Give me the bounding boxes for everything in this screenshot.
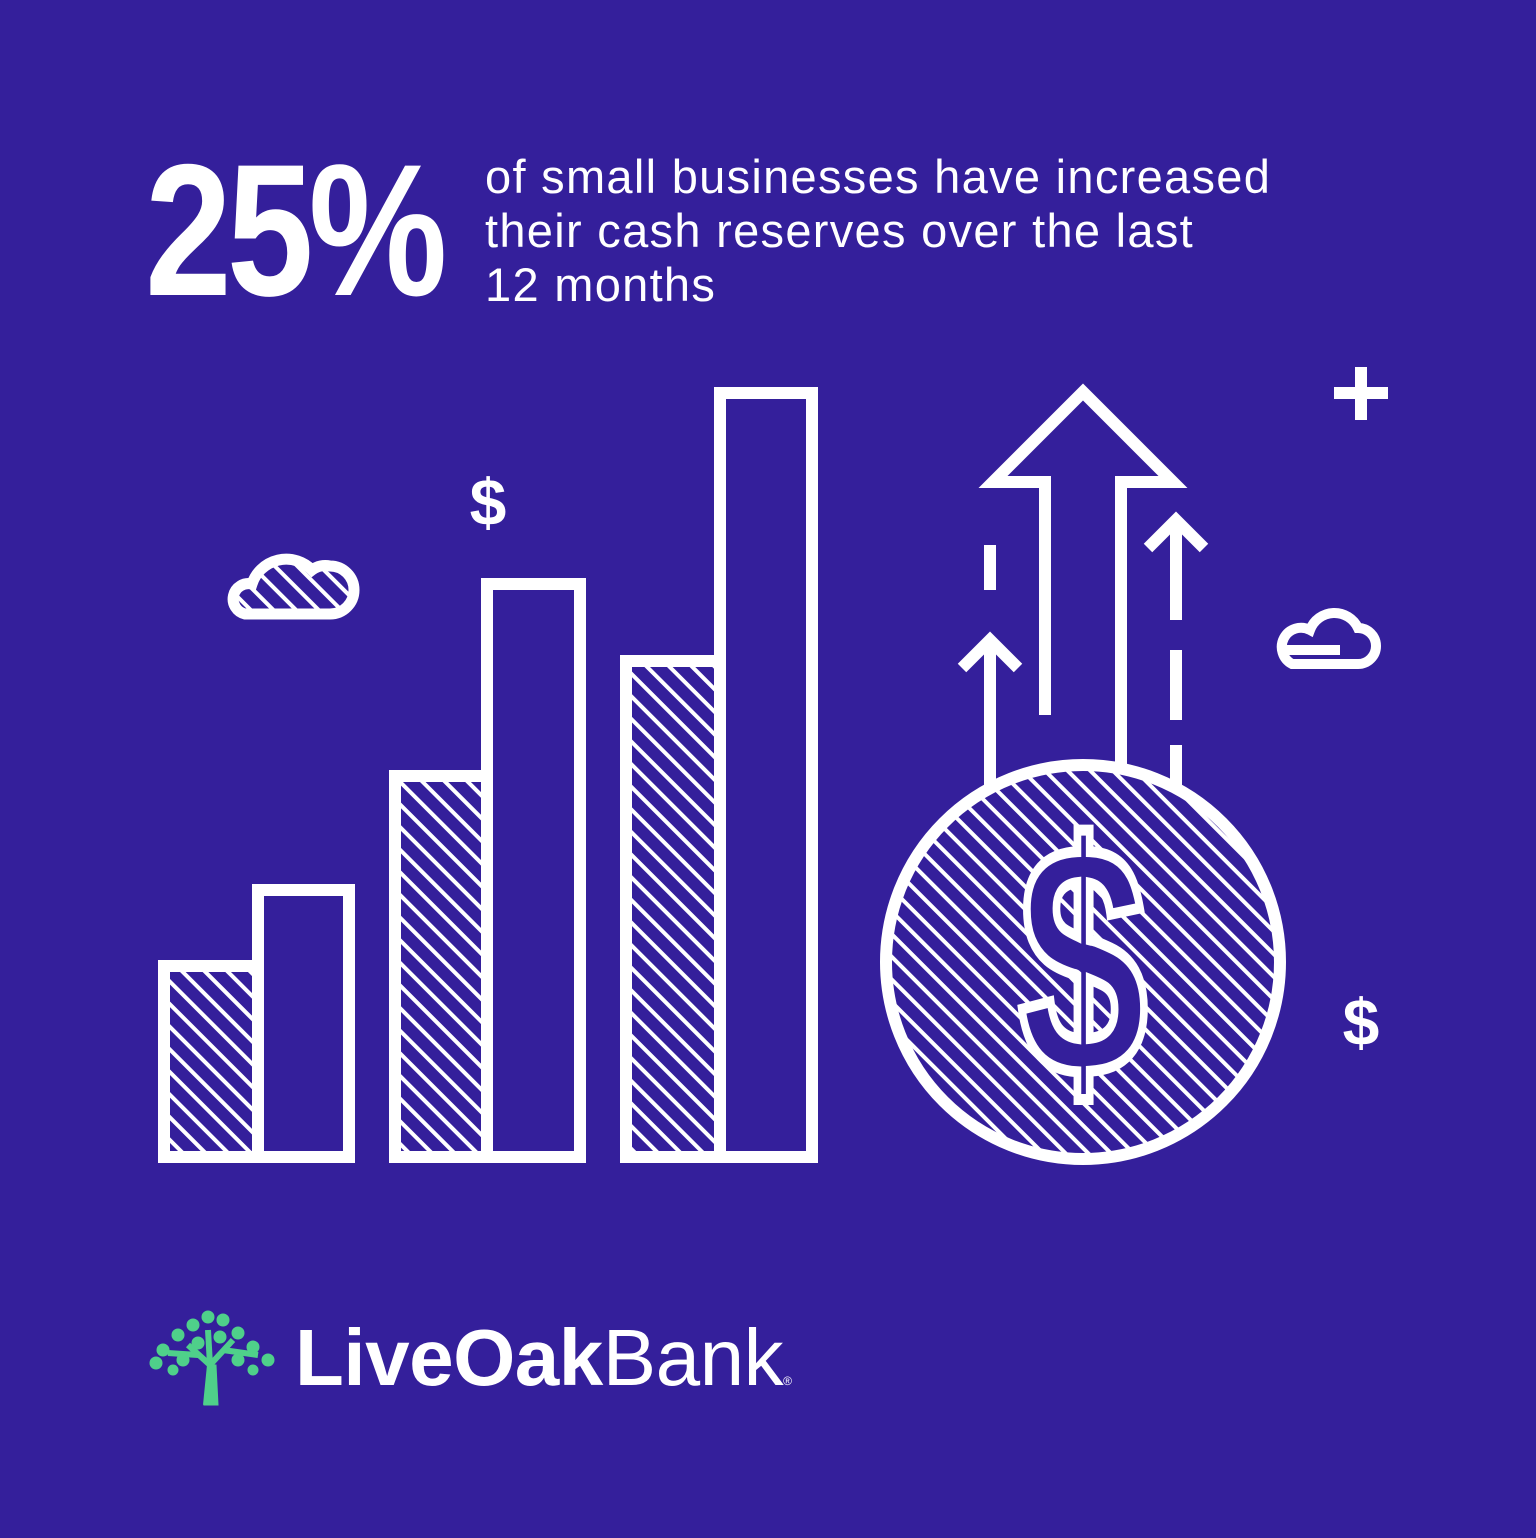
logo [150, 1310, 792, 1406]
arrows [962, 392, 1204, 785]
icon: hatched cloud [233, 559, 354, 614]
icon: dollar signs: $ [470, 465, 506, 539]
wordmark: LiveOakBank® [295, 1313, 791, 1402]
icon: small cloud [1282, 613, 1376, 664]
icon: dollar signs [470, 465, 1379, 1059]
icon: dollar signs: $ [1343, 985, 1379, 1059]
headline description: of small businesses have increased [485, 150, 1271, 203]
headline description: their cash reserves over the last [485, 204, 1194, 257]
icon: tree [150, 1310, 274, 1406]
icon: plus [1334, 367, 1388, 420]
coin with dollar: $ [1019, 777, 1147, 1146]
headline stat: 25% [145, 125, 442, 335]
bar chart [164, 393, 812, 1157]
headline description [485, 150, 1271, 311]
coin with dollar [886, 765, 1280, 1159]
headline description: 12 months [485, 258, 716, 311]
